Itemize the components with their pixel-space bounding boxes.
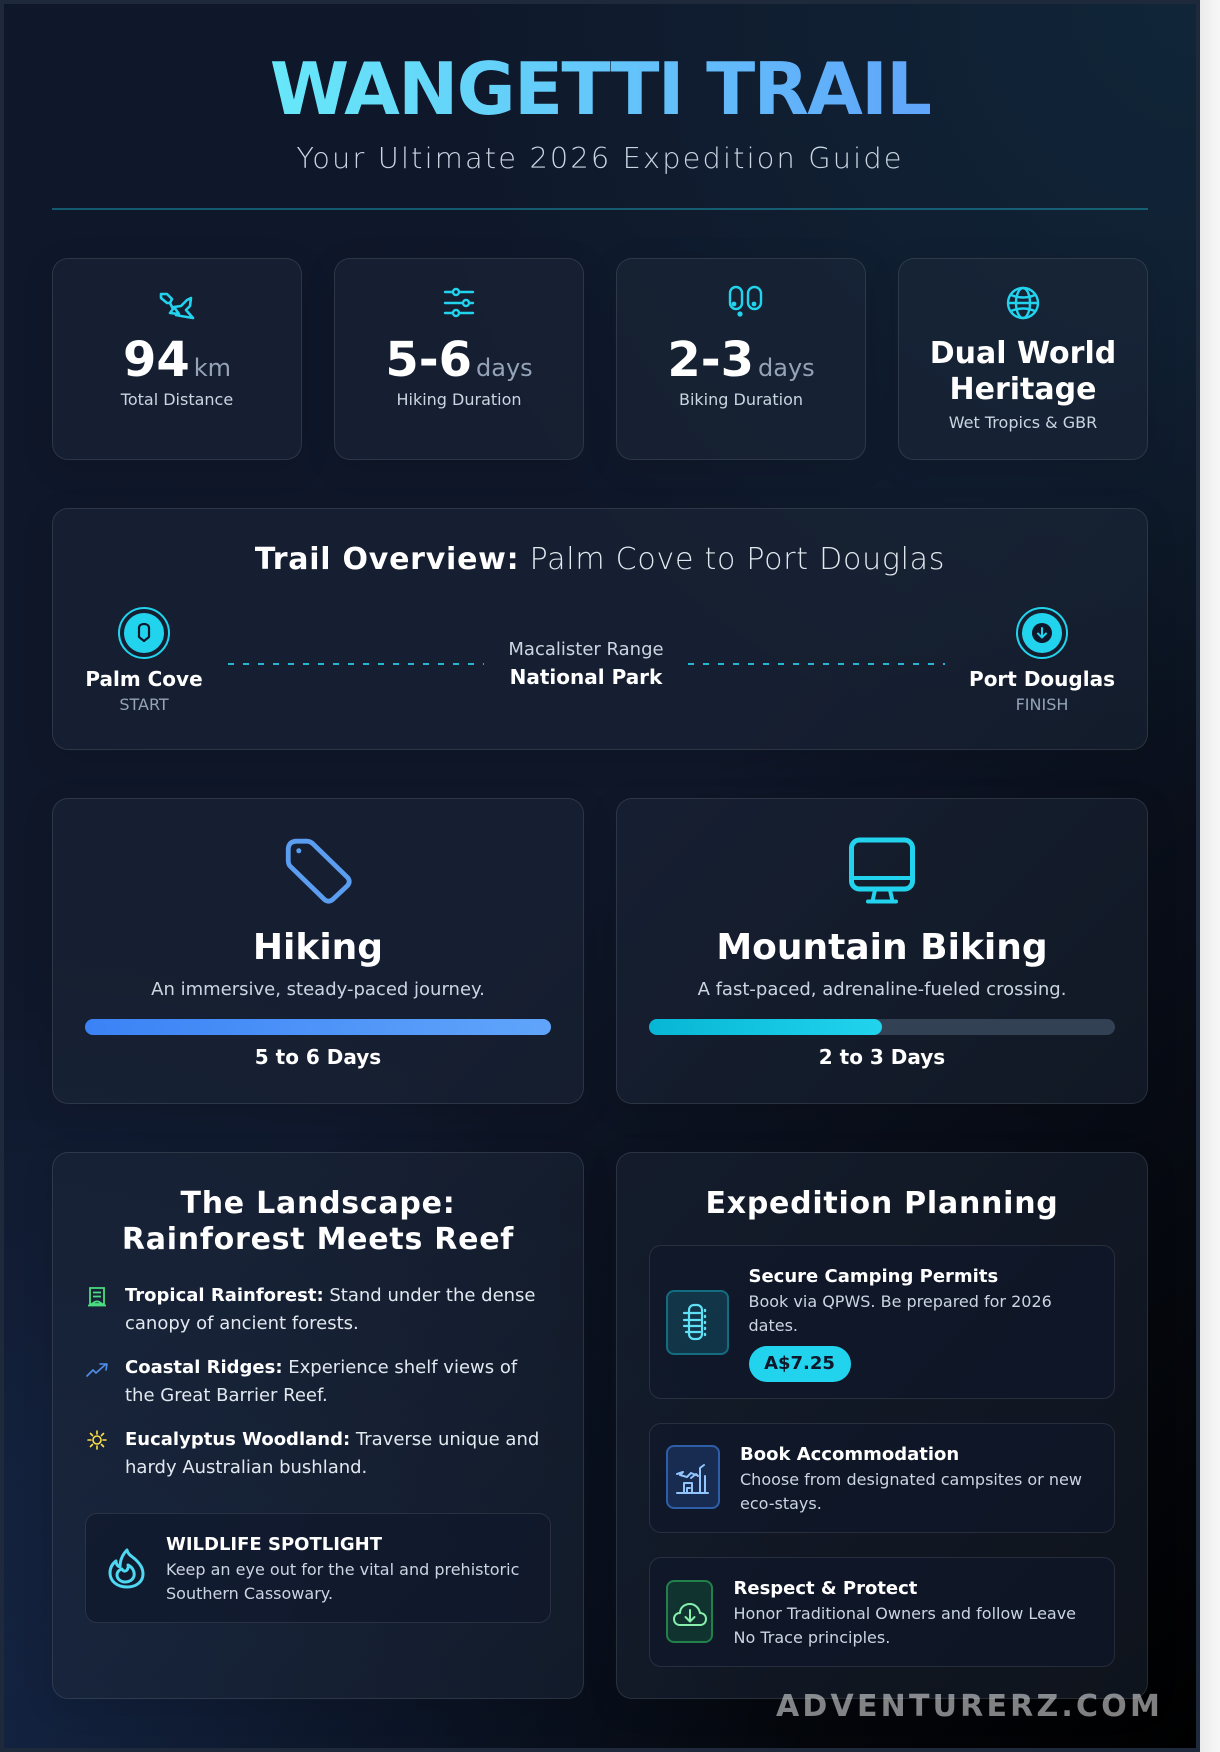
panel: the landscape (52, 1152, 584, 1699)
label: Hiking Duration (396, 390, 522, 409)
icon: map route (160, 292, 194, 320)
list item: eucalyptus: Eucalyptus Woodland: Traverse unique and (125, 1429, 539, 1450)
heading: The Landscape: (180, 1186, 456, 1221)
icon: twin ovals (728, 286, 762, 317)
heading: Hiking (253, 926, 383, 968)
label: Biking Duration (679, 390, 803, 409)
stat card: biking duration (616, 258, 866, 460)
stat card: total distance (52, 258, 302, 460)
heading: Heritage (950, 372, 1096, 407)
step title: Book Accommodation (740, 1444, 959, 1465)
icon: permit (666, 1290, 729, 1355)
list item: coastal ridges: the Great Barrier Reef. (125, 1385, 328, 1406)
step text: dates. (748, 1316, 798, 1334)
list item: rainforest (125, 1285, 536, 1334)
icon: sliders (444, 288, 474, 318)
panel: expedition planning (616, 1152, 1148, 1699)
callout text: Southern Cassowary. (166, 1584, 333, 1602)
step text: eco-stays. (740, 1494, 822, 1512)
description: An immersive, steady-paced journey. (151, 979, 485, 1000)
heading: Dual World (930, 336, 1116, 371)
icon: coastal ridges (86, 1363, 108, 1377)
stat card: hiking duration (334, 258, 584, 460)
icon: finish arrow (1022, 613, 1062, 653)
icon: tag (286, 838, 352, 904)
heading (930, 336, 1116, 407)
icon: sun (87, 1430, 107, 1450)
value: 2-3days (667, 332, 815, 388)
price pill: A$7.25 (764, 1353, 835, 1374)
panel: hiking (52, 798, 584, 1104)
icon: accommodation (666, 1445, 720, 1509)
step text (740, 1470, 1082, 1512)
icon: rainforest (88, 1287, 106, 1306)
finish marker (1016, 607, 1068, 659)
heading: Expedition Planning (705, 1186, 1059, 1221)
label: Total Distance (121, 390, 233, 409)
icon: monitor (849, 838, 915, 904)
progress bar (85, 1019, 551, 1035)
list item: rainforest: canopy of ancient forests. (125, 1313, 359, 1334)
watermark: ADVENTURERZ.COM (776, 1689, 1163, 1724)
step text: Honor Traditional Owners and follow Leave (734, 1604, 1076, 1622)
icon: cloud (666, 1580, 713, 1643)
finish name: Port Douglas (969, 667, 1115, 691)
icon: start pin (124, 613, 164, 653)
step text (734, 1604, 1076, 1646)
list item: coastal ridges (125, 1357, 518, 1406)
list item: coastal ridges: Coastal Ridges: Experience shelf views of (125, 1357, 517, 1378)
progress bar (649, 1019, 1115, 1035)
price pill (748, 1346, 850, 1382)
midpoint name: National Park (510, 665, 662, 689)
step: respect (649, 1557, 1115, 1667)
start name: Palm Cove (85, 667, 203, 691)
step title: Respect & Protect (734, 1578, 917, 1599)
heading: Rainforest Meets Reef (122, 1222, 514, 1257)
heading: Trail Overview: Palm Cove to Port Douglas (255, 542, 945, 577)
heading: Mountain Biking (716, 926, 1048, 968)
title: WANGETTI TRAIL (270, 47, 930, 131)
heading (122, 1186, 514, 1257)
list item: eucalyptus (125, 1429, 539, 1478)
step text: No Trace principles. (734, 1628, 890, 1646)
panel: mountain biking (616, 798, 1148, 1104)
label: Wet Tropics & GBR (949, 413, 1097, 432)
finish tag: FINISH (1016, 694, 1068, 714)
list item: eucalyptus: hardy Australian bushland. (125, 1457, 367, 1478)
list item: rainforest: Tropical Rainforest: Stand under the dense (125, 1285, 536, 1306)
step title: Secure Camping Permits (748, 1266, 998, 1287)
duration: 5 to 6 Days (255, 1045, 381, 1069)
callout: wildlife spotlight (85, 1513, 551, 1623)
callout text: Keep an eye out for the vital and prehistoric (166, 1560, 519, 1578)
description: A fast-paced, adrenaline-fueled crossing. (698, 979, 1066, 1000)
value: 5-6days (385, 332, 533, 388)
icon: globe (1006, 286, 1040, 320)
step text (748, 1292, 1052, 1334)
step: accommodation (649, 1423, 1115, 1533)
start marker (118, 607, 170, 659)
icon: flame (108, 1548, 144, 1588)
panel: trail overview (52, 508, 1148, 750)
step: permits (649, 1245, 1115, 1399)
callout title: WILDLIFE SPOTLIGHT (166, 1534, 382, 1555)
step text: Choose from designated campsites or new (740, 1470, 1082, 1488)
step text: Book via QPWS. Be prepared for 2026 (748, 1292, 1052, 1310)
start tag: START (119, 694, 169, 714)
value: 94km (123, 332, 231, 388)
callout text (166, 1560, 519, 1602)
subtitle: Your Ultimate 2026 Expedition Guide (296, 140, 904, 174)
stat card: dual world heritage (898, 258, 1148, 460)
midpoint label: Macalister Range (508, 639, 664, 660)
duration: 2 to 3 Days (819, 1045, 945, 1069)
